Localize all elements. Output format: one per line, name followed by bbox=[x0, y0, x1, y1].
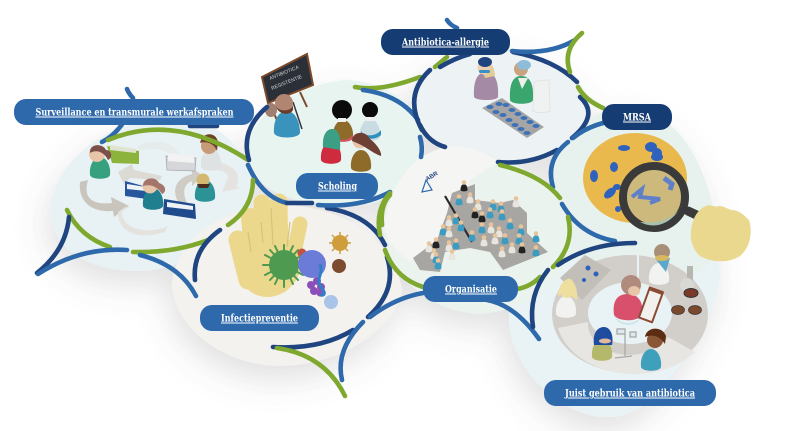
blob: antibiotica-allergie bbox=[410, 48, 590, 164]
chalkboard bbox=[262, 54, 313, 127]
virus: red bbox=[298, 248, 306, 258]
folder: green bbox=[107, 145, 139, 164]
ring table bbox=[552, 255, 708, 374]
label: Infectiepreventie: Infectiepreventie bbox=[221, 314, 298, 324]
hand bbox=[236, 202, 303, 297]
person: light blue bbox=[360, 102, 381, 141]
panel: organisatie illustration bbox=[385, 147, 548, 272]
label: Surveillance en transmurale werkafspraken: Surveillance en transmurale werkafspraken bbox=[36, 108, 234, 118]
blob: MRSA bbox=[547, 109, 718, 288]
folder: blue bbox=[125, 181, 147, 199]
person: white coat bbox=[649, 244, 670, 285]
label: Antibiotica-allergie: Antibiotica-allergie bbox=[401, 38, 489, 48]
blob: scholing bbox=[245, 80, 421, 206]
person: small teal bbox=[195, 174, 215, 202]
white fan bbox=[385, 147, 498, 262]
side table bbox=[560, 255, 611, 300]
folder: gray bbox=[166, 153, 196, 171]
person: hijab bbox=[592, 327, 613, 361]
person: dark skin bbox=[641, 329, 666, 371]
label: MRSA: MRSA bbox=[623, 112, 651, 124]
label: MRSA bbox=[602, 104, 672, 130]
person: green bbox=[510, 60, 533, 104]
label: Scholing: Scholing bbox=[318, 182, 357, 192]
blob: juist gebruik bbox=[509, 222, 720, 417]
bottle bbox=[533, 80, 550, 112]
magnifying glass bbox=[623, 166, 703, 228]
virus: green bbox=[263, 245, 305, 287]
ABR logo bbox=[422, 171, 440, 192]
clipboard bbox=[638, 286, 664, 324]
panel: scholing illustration bbox=[262, 54, 381, 172]
petri dish bbox=[583, 133, 687, 223]
panel: antibiotica-allergie illustration bbox=[474, 57, 550, 138]
IV stand bbox=[615, 329, 636, 358]
blob: infectiepreventie bbox=[172, 205, 402, 366]
label: Surveillance en transmurale werkafspraken bbox=[14, 99, 254, 125]
virus: light blue bbox=[324, 295, 338, 309]
panel: juist gebruik illustration bbox=[552, 244, 708, 374]
background blobs bbox=[50, 48, 720, 417]
bacteria bbox=[590, 142, 663, 212]
cycle arrows bbox=[80, 142, 240, 235]
panel: surveillance illustration bbox=[80, 134, 240, 235]
microscope bbox=[680, 266, 698, 298]
map figures bbox=[426, 180, 540, 269]
person: hijab red bbox=[321, 129, 341, 164]
chalkboard: RESISTENTIE bbox=[271, 74, 304, 92]
label: Organisatie: Organisatie bbox=[445, 284, 497, 296]
petri dishes bbox=[672, 306, 702, 314]
label: Juist gebruik van antibiotica bbox=[544, 380, 716, 406]
panel: infectiepreventie illustration bbox=[236, 202, 351, 309]
pointer stick bbox=[293, 102, 302, 129]
virus: purple cluster bbox=[307, 277, 325, 296]
person: gray bbox=[200, 134, 221, 171]
label: Organisatie bbox=[423, 276, 518, 302]
label: Scholing bbox=[296, 173, 378, 199]
person: red bbox=[614, 275, 642, 325]
blister pack bbox=[482, 98, 544, 138]
folder: blue large bbox=[163, 199, 196, 219]
ABR logo: ABR bbox=[425, 171, 440, 183]
hand with magnifier bbox=[691, 205, 751, 261]
person: teacher bbox=[265, 94, 300, 138]
person: brown pink bbox=[332, 100, 353, 142]
bacterium: blue bbox=[319, 264, 324, 295]
person: brown hair bbox=[351, 133, 381, 172]
label: Juist gebruik van antibiotica: Juist gebruik van antibiotica bbox=[564, 388, 695, 400]
virus: orange bbox=[329, 232, 351, 254]
person: purple bbox=[474, 57, 498, 100]
label: Antibiotica-allergie bbox=[381, 29, 510, 55]
virus: blue bbox=[298, 250, 326, 278]
person: green bbox=[89, 145, 111, 179]
panel: MRSA illustration bbox=[583, 133, 751, 261]
pointer bbox=[445, 196, 472, 242]
person: teal bbox=[142, 178, 165, 210]
person: blonde bbox=[556, 279, 577, 318]
blob: organisatie bbox=[383, 150, 572, 314]
label: Infectiepreventie bbox=[200, 305, 319, 331]
virus: brown bbox=[332, 259, 346, 273]
network arcs bbox=[37, 20, 635, 396]
vials bbox=[582, 266, 598, 282]
map bbox=[413, 184, 548, 272]
board text: ANTIBIOTICA bbox=[269, 64, 300, 82]
blob: surveillance bbox=[50, 122, 253, 271]
